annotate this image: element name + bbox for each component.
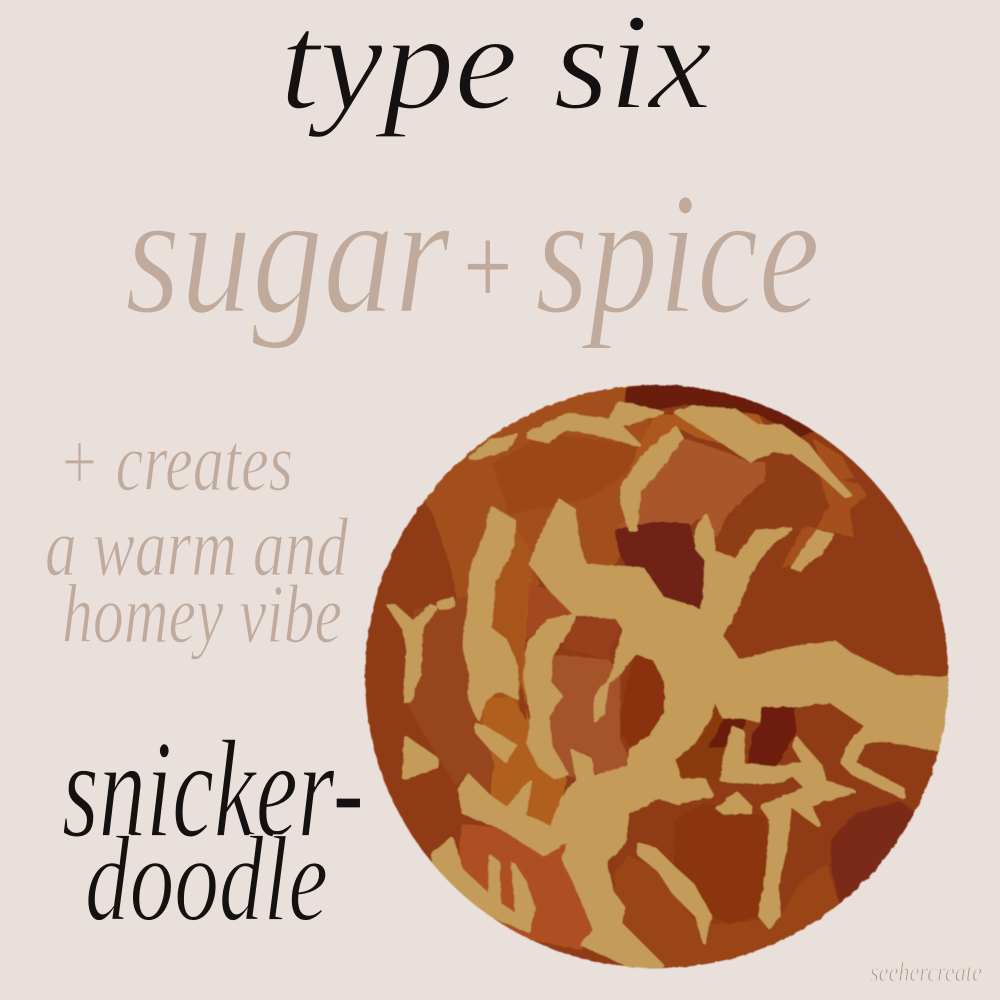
cookie name: [62, 712, 364, 947]
description text: [45, 416, 349, 661]
cookie name: doodle: [85, 812, 328, 947]
description text: + creates: [58, 416, 293, 509]
cinnamon sugar swirls: [389, 403, 957, 977]
heading: sugar + spice: sugar: [125, 156, 451, 350]
description text: a warm and: [45, 501, 349, 594]
cookie clipped to round shape: [362, 380, 957, 977]
snickerdoodle cookie illustration: [362, 380, 957, 977]
heading: sugar + spice: [125, 156, 820, 350]
description text: homey vibe: [62, 568, 342, 661]
cookie base: [362, 382, 951, 971]
heading: sugar + spice: spice: [535, 156, 820, 350]
brown patches: [406, 380, 926, 977]
heading: sugar + spice: +: [458, 205, 516, 329]
cookie name: snicker-: [62, 712, 364, 867]
